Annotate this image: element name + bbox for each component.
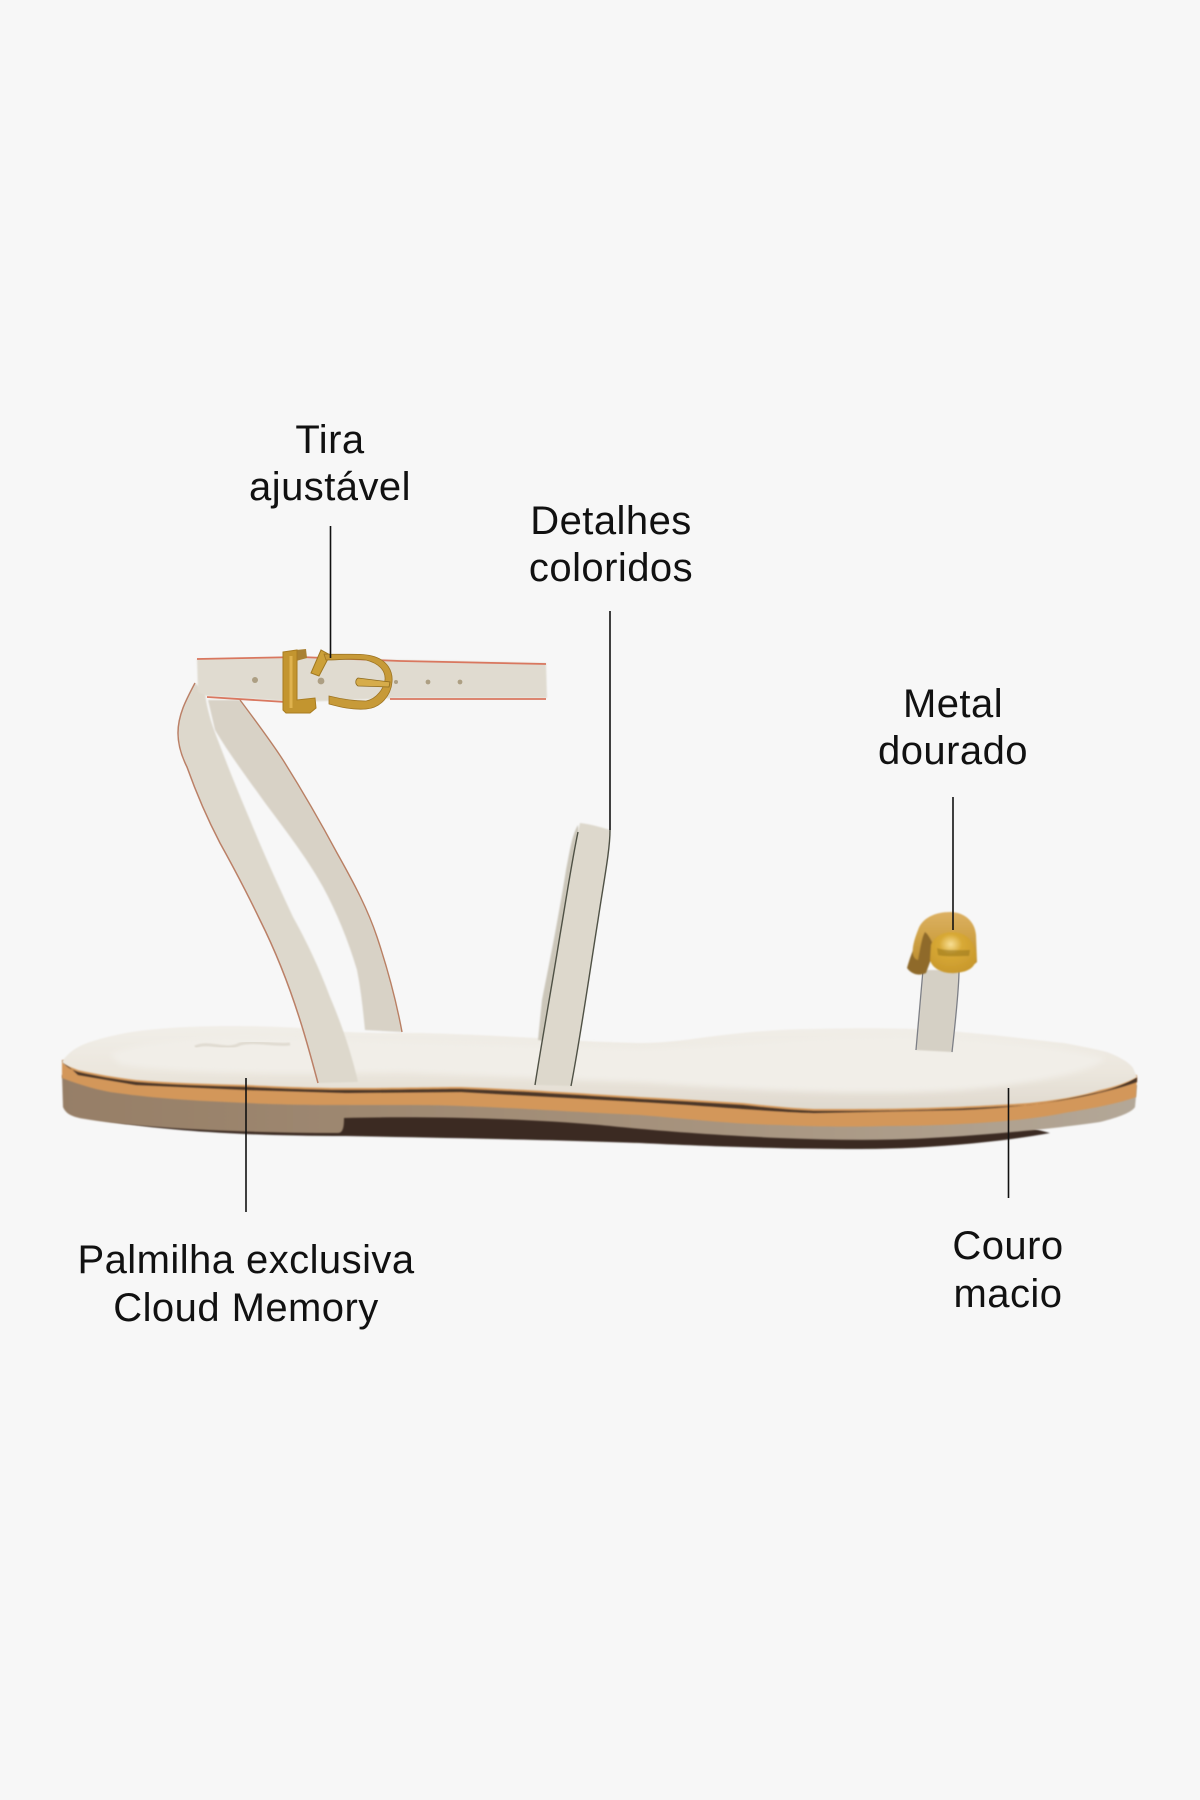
rear ankle strap — [208, 700, 402, 1032]
callout: Tira ajustável — [249, 418, 411, 658]
insole highlights and embossed logo — [110, 1036, 1105, 1092]
front ankle strap — [178, 683, 358, 1083]
insole — [62, 1026, 1137, 1109]
callout: Detalhes coloridos: coloridos — [529, 546, 693, 590]
callout: Detalhes coloridos — [529, 499, 693, 830]
callout: Detalhes coloridos: Detalhes — [530, 499, 692, 543]
ankle strap band — [197, 657, 547, 702]
callout: Tira ajustável: Tira — [295, 418, 365, 462]
strap holes — [252, 677, 462, 684]
sole shadow — [70, 1112, 1050, 1149]
toe strap — [916, 970, 959, 1052]
callout: Metal dourado — [878, 682, 1028, 930]
insole edge line — [62, 1060, 1137, 1113]
callout: Palmilha exclusiva Cloud Memory: Cloud Memory — [113, 1286, 379, 1330]
callout: Couro macio — [952, 1088, 1064, 1316]
gold toe ring — [907, 912, 977, 975]
callout: Tira ajustável: ajustável — [249, 465, 411, 509]
callout: Palmilha exclusiva Cloud Memory: Palmilha exclusiva — [77, 1238, 415, 1282]
gold buckle — [283, 649, 392, 713]
tan midsole — [62, 1060, 1137, 1127]
callout: Metal dourado: dourado — [878, 729, 1028, 773]
callout: Couro macio: Couro — [952, 1224, 1064, 1268]
callout: Metal dourado: Metal — [903, 682, 1003, 726]
outsole — [62, 1075, 1137, 1140]
callout: Couro macio: macio — [954, 1272, 1062, 1316]
callout: Palmilha exclusiva Cloud Memory — [77, 1078, 415, 1330]
sandal illustration — [62, 649, 1137, 1149]
centre strap — [535, 823, 610, 1086]
